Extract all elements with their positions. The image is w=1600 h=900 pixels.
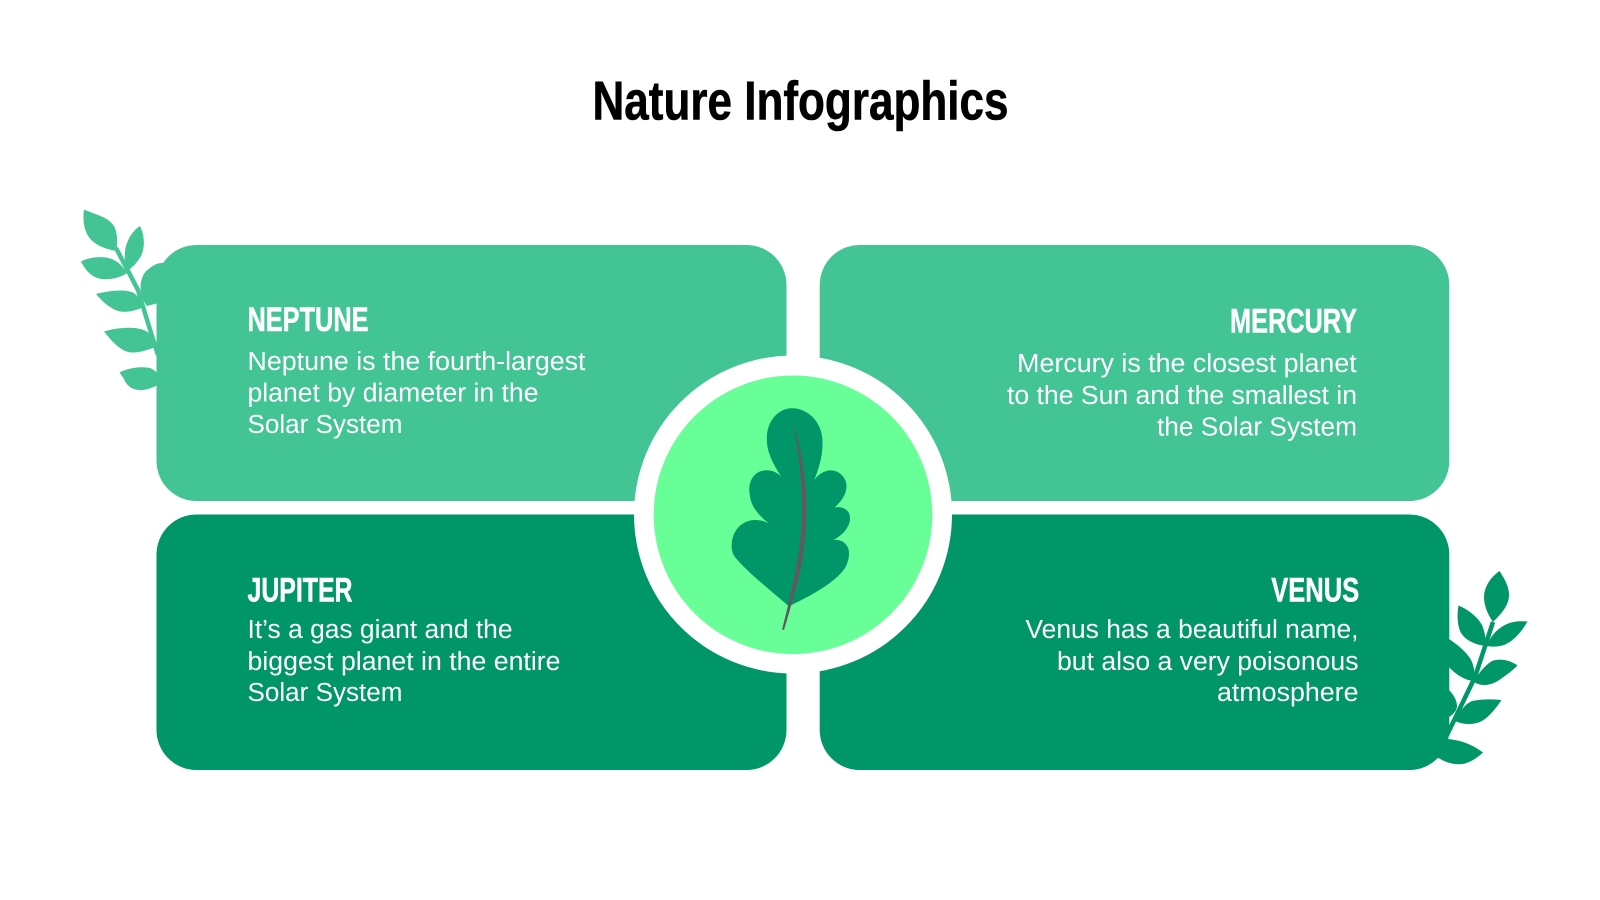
text block: Jupiter: biggest planet in the entire: [248, 648, 560, 676]
text block: Venus: Venus has a beautiful name,: [1026, 616, 1358, 644]
text block: Neptune: planet by diameter in the: [248, 380, 538, 408]
icon: oak leaf: [732, 408, 850, 630]
icon: right sprig: [1430, 571, 1528, 764]
heading: Venus: VENUS: [1271, 572, 1359, 610]
heading: Neptune: NEPTUNE: [248, 301, 368, 339]
title: Nature Infographics: [592, 70, 1008, 132]
text block: Neptune: [248, 348, 586, 439]
icon: left sprig: [81, 210, 170, 390]
text block: Neptune: Neptune is the fourth-largest: [248, 348, 586, 376]
panel: Venus: [820, 514, 1449, 770]
panel: Jupiter: [156, 514, 786, 770]
heading: Mercury: MERCURY: [1230, 303, 1357, 341]
icon: leaf vein: [782, 419, 806, 630]
text block: Jupiter: It’s a gas giant and the: [248, 616, 512, 644]
panel: Neptune: [156, 245, 786, 501]
text block: Venus: [1026, 616, 1358, 707]
text block: Mercury: [1007, 350, 1357, 442]
text block: Mercury: to the Sun and the smallest in: [1007, 382, 1357, 410]
central emblem: [634, 356, 952, 674]
text block: Jupiter: Solar System: [248, 679, 402, 707]
text block: Venus: atmosphere: [1217, 679, 1358, 707]
text block: Jupiter: [248, 616, 560, 707]
text block: Mercury: the Solar System: [1157, 414, 1357, 442]
heading: Jupiter: JUPITER: [248, 572, 352, 610]
panel: Mercury: [820, 245, 1449, 501]
text block: Neptune: Solar System: [248, 411, 402, 439]
text block: Venus: but also a very poisonous: [1057, 648, 1358, 676]
text block: Mercury: Mercury is the closest planet: [1017, 350, 1357, 378]
